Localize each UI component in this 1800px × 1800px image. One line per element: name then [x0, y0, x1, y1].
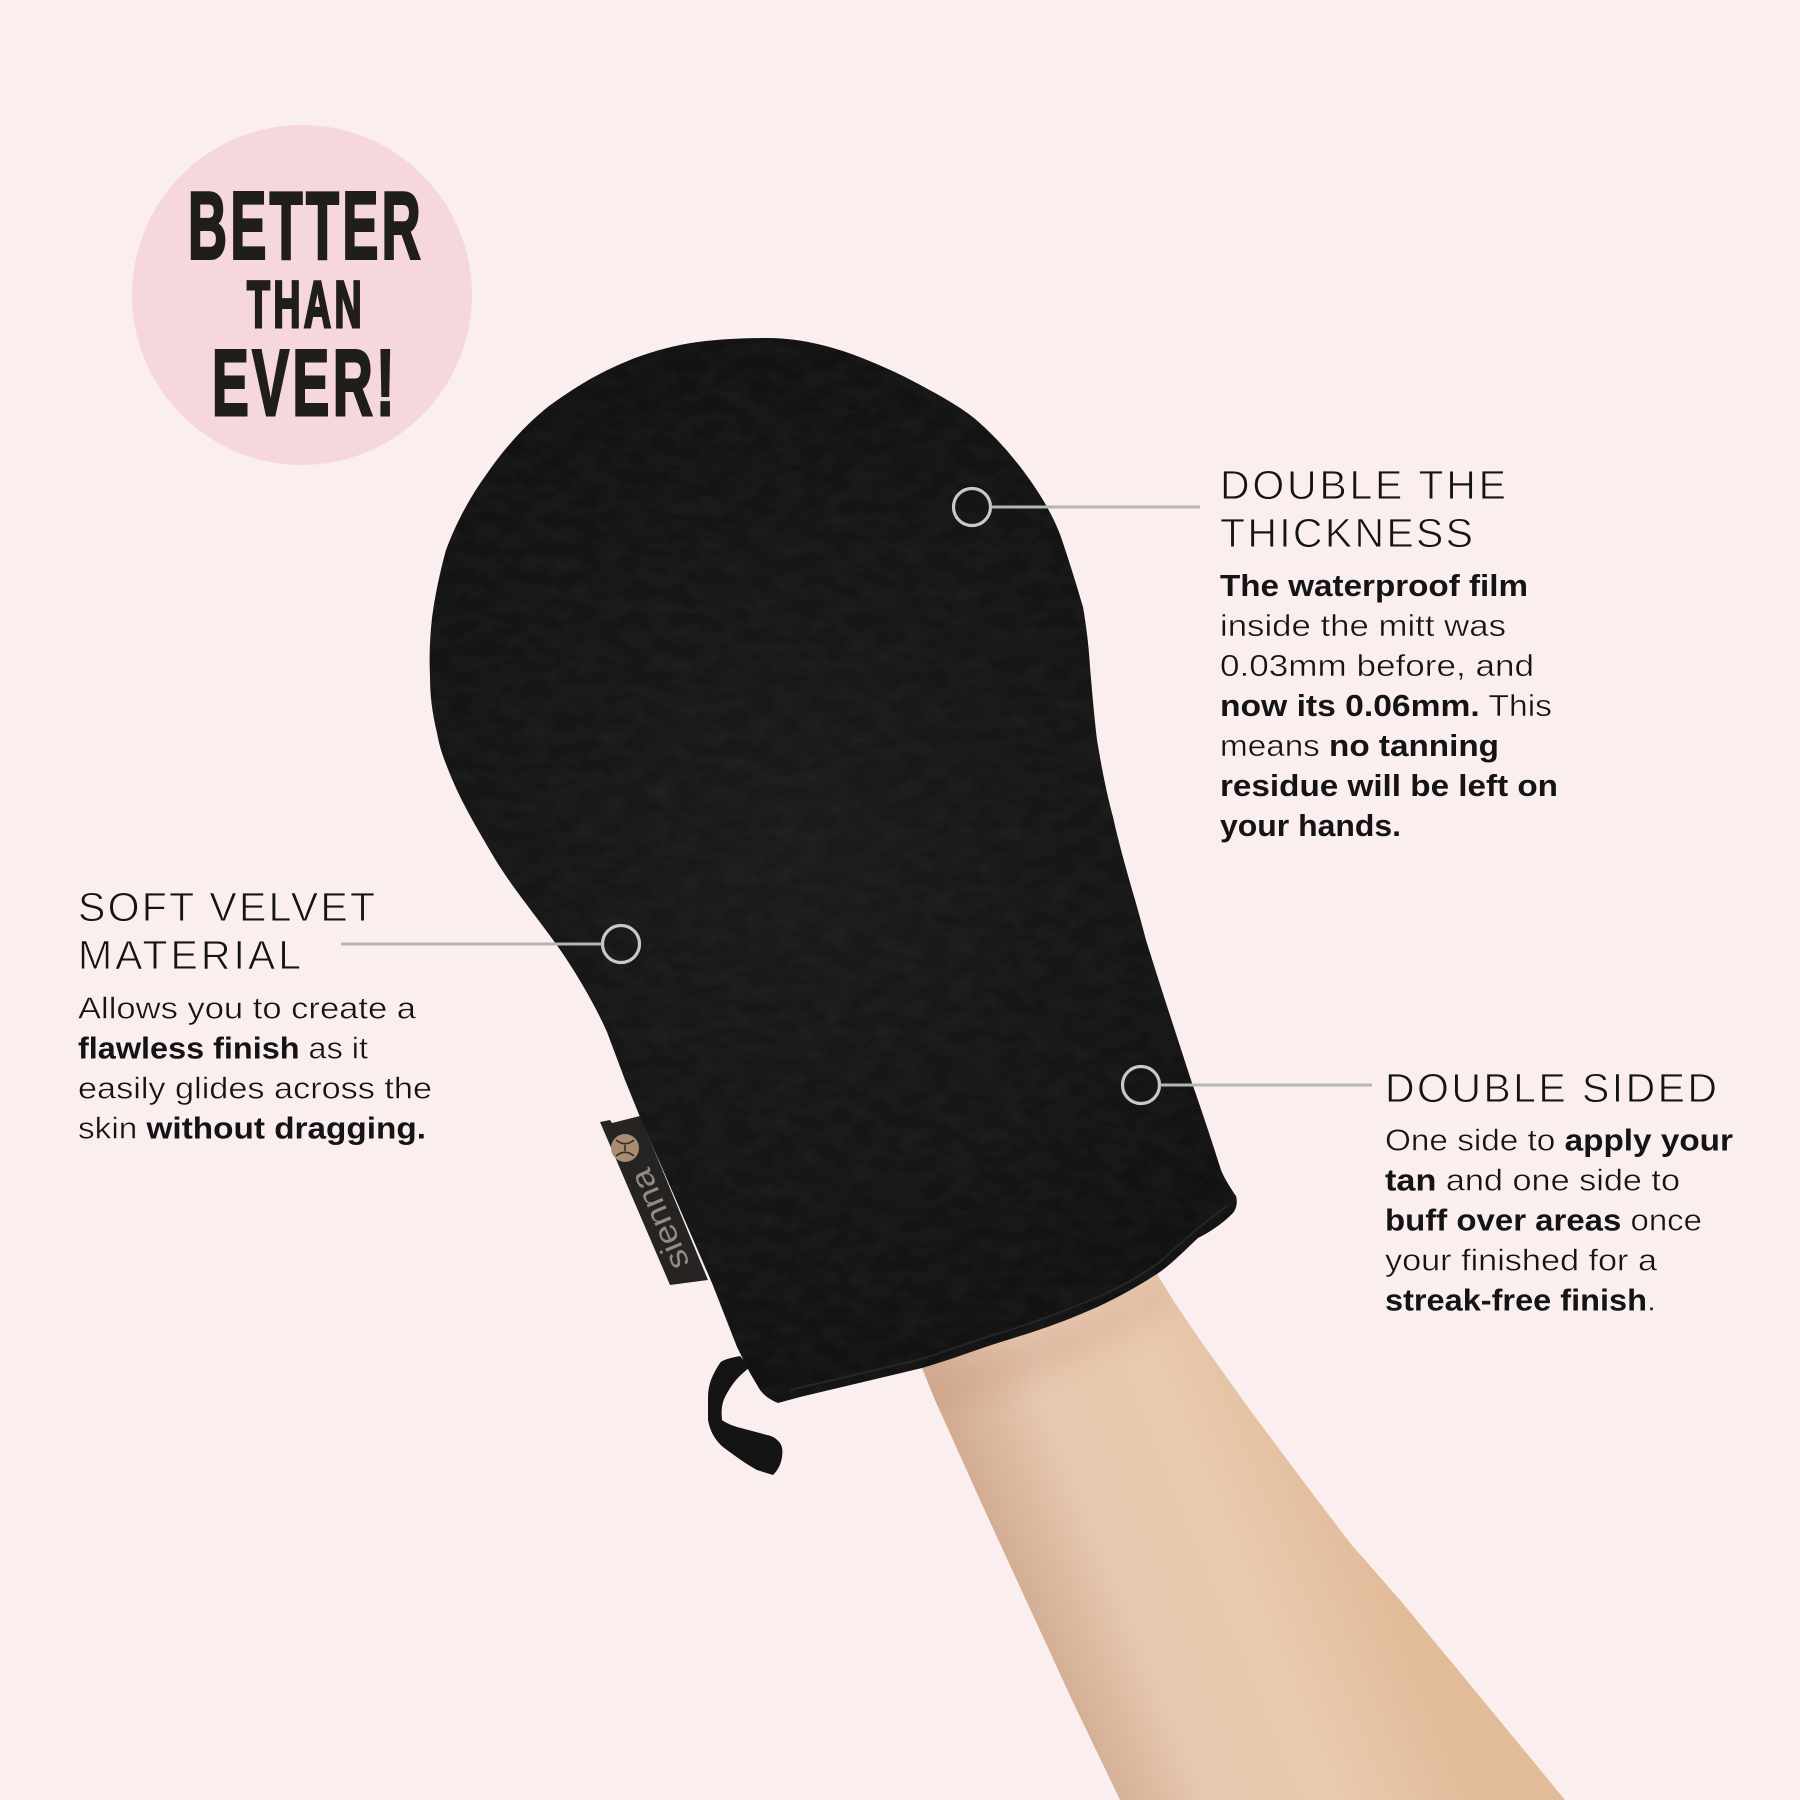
heading: thickness [1220, 462, 1506, 556]
body: velvet: easily glides across the [78, 1070, 432, 1106]
body: thickness: inside the mitt was [1220, 608, 1506, 643]
body: thickness: your hands. [1220, 808, 1401, 843]
heading: thickness: THICKNESS [1220, 510, 1473, 556]
badge: better than ever: BETTER [188, 172, 424, 280]
callout: double sided [1122, 1065, 1733, 1318]
brand tag [600, 1116, 708, 1285]
body: thickness: means no tanning [1220, 728, 1499, 763]
body: sided: your finished for a [1385, 1242, 1658, 1278]
body: sided: buff over areas once [1385, 1202, 1702, 1238]
body: thickness [1220, 568, 1558, 843]
heading: sided: DOUBLE SIDED [1385, 1065, 1717, 1111]
body: velvet: flawless finish as it [78, 1030, 368, 1066]
tag logo [611, 1134, 639, 1162]
badge: better than ever: THAN [247, 267, 365, 341]
body: thickness: The waterproof film [1220, 568, 1528, 603]
callout: double the thickness [954, 462, 1558, 843]
hanging loop [708, 1356, 782, 1475]
body: thickness: 0.03mm before, and [1220, 648, 1534, 683]
callout: soft velvet material [78, 884, 640, 1146]
arm [915, 1274, 1565, 1800]
body: sided [1385, 1122, 1733, 1318]
body: sided: streak-free finish . [1385, 1282, 1656, 1318]
body: velvet: skin without dragging. [78, 1110, 426, 1146]
heading: velvet: MATERIAL [78, 932, 301, 978]
pointer: velvet [341, 926, 640, 962]
body: sided: One side to apply your [1385, 1122, 1733, 1158]
pointer: thickness [954, 488, 1200, 526]
badge: better than ever [132, 125, 472, 465]
body: velvet: Allows you to create a [78, 990, 417, 1026]
mitt hem stitching [790, 1205, 1228, 1390]
pointer: sided [1122, 1066, 1372, 1104]
heading: velvet: SOFT VELVET [78, 884, 375, 930]
body: velvet [78, 990, 432, 1146]
mitt [430, 338, 1237, 1403]
body: thickness: residue will be left on [1220, 768, 1558, 803]
heading: thickness: DOUBLE THE [1220, 462, 1506, 508]
heading: velvet [78, 884, 375, 978]
body: sided: tan and one side to [1385, 1162, 1680, 1198]
tag wordmark: sienna [622, 1163, 696, 1275]
badge: better than ever: EVER! [212, 330, 398, 435]
body: thickness: now its 0.06mm. This [1220, 688, 1552, 723]
